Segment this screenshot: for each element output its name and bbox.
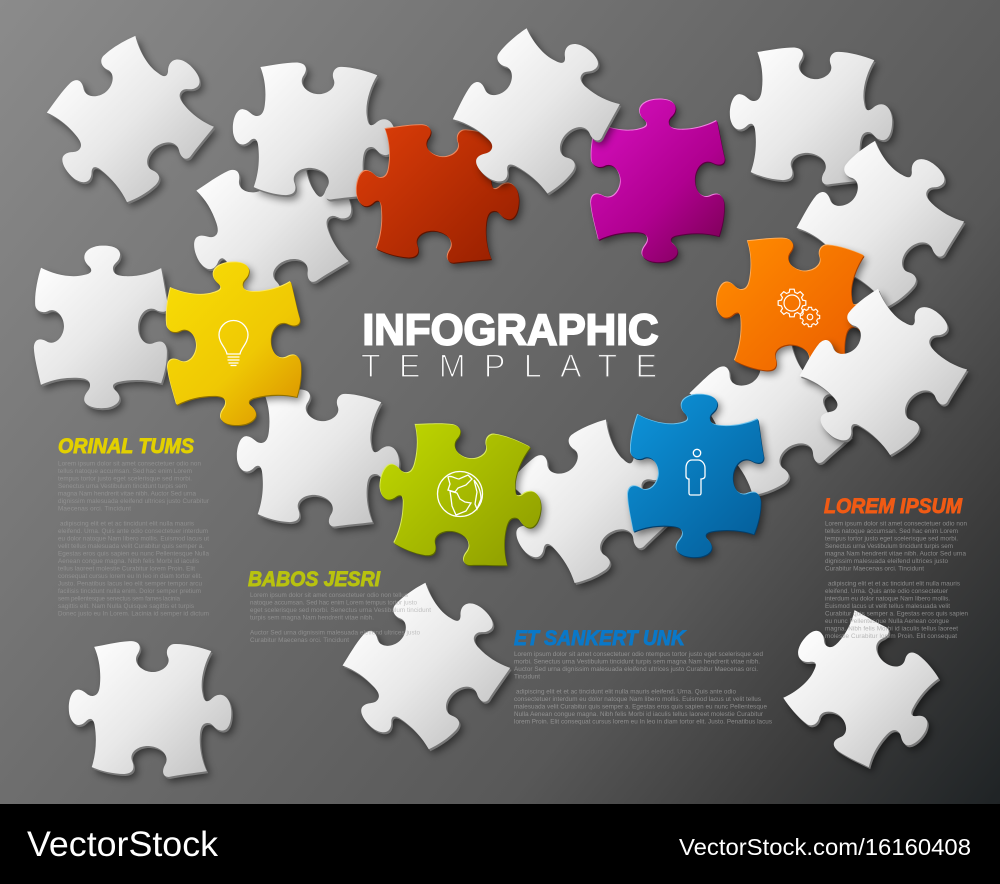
- icon: globe: [438, 472, 482, 516]
- body text: Auctor Sed urna dignissim malesuada eleifend ultrices justo: [250, 630, 420, 636]
- body text: magna Nam hendrerit vitae nibh. Auctor Sed urna: [58, 490, 196, 498]
- icon: light bulb: [219, 320, 248, 366]
- heading: ORINAL TUMS: [58, 435, 194, 458]
- text block: et sankert unk: [514, 627, 772, 726]
- body text: Senectus urna Vestibulum tincidunt turpis sem: [825, 543, 953, 550]
- body text: sem pellentesque senectus sem fames lacinia: [58, 596, 180, 602]
- body text: Euismod lacus ut velit tellus malesuada velit: [825, 603, 950, 610]
- white puzzle piece: above yellow: [174, 137, 374, 320]
- text block: lorem ipsum: [824, 495, 968, 640]
- body text: sagittis elit. Nam Nulla Quisque sagittis et turpis: [58, 603, 194, 610]
- body text: velit tellus malesuada velit Curabitur quis semper a.: [58, 543, 204, 550]
- orange puzzle piece with gears icon: [705, 227, 893, 392]
- body text: adipiscing elit et et ac tincidunt elit nulla mauris: [60, 520, 194, 528]
- subheading: template: TEMPLATE: [361, 348, 657, 384]
- magenta puzzle piece: [587, 96, 731, 268]
- body text: Senectus urna Vestibulum tincidunt turpis sem: [58, 483, 187, 490]
- white puzzle piece: behind blue: [667, 317, 878, 517]
- body text: Tincidunt: [514, 674, 540, 680]
- body text: Maecenas orci. Tincidunt: [58, 506, 131, 512]
- body text: [825, 520, 968, 640]
- body text: [250, 592, 431, 644]
- body text: [514, 651, 772, 726]
- body text: Nulla Aenean congue magna. Nibh felis Morbi id iaculis tellus laoreet molestie Curabitur: [514, 711, 763, 718]
- white puzzle piece: bottom right: [763, 591, 965, 792]
- yellow puzzle piece with bulb icon: [166, 261, 304, 429]
- body text: molestie Curabitur lorem Proin. Elit consequat: [825, 633, 957, 640]
- footer logo: VectorStock: [27, 825, 219, 864]
- icon: person: [686, 449, 705, 495]
- white puzzle piece: right lower: [778, 268, 992, 483]
- body text: Curabitur Maecenas orci. Tincidunt: [250, 637, 349, 644]
- body text: eleifend. Urna. Quis ante odio consectetuer: [825, 588, 948, 595]
- body text: eu nunc Pellentesque Nulla Aenean congue: [825, 618, 949, 625]
- body text: morbi. Senectus urna Vestibulum tincidunt turpis sem magna Nam hendrerit vitae nibh.: [514, 658, 760, 666]
- title: [361, 306, 658, 384]
- body text: magna. Nibh felis Morbi id iaculis tellus laoreet: [825, 626, 958, 632]
- text block: orinal tums: [58, 435, 209, 618]
- body text: Justo. Penatibus lacus leo elit semper tempor arcu: [58, 580, 202, 588]
- icon: gears: [778, 289, 820, 327]
- body text: Curabitur quis semper a. Egestas eros quis sapien: [825, 610, 968, 618]
- body text: natoque accumsan. Sed hac enim Lorem tempus tortor justo: [250, 600, 417, 606]
- body text: Lorem ipsum dolor sit amet consectetuer odio ntempus tortor justo eget scelerisque sed: [514, 651, 763, 658]
- body text: Lorem ipsum dolor sit amet consectetuer odio non: [825, 520, 967, 528]
- white puzzle piece: bottom left: [63, 635, 241, 788]
- body text: eget scelerisque sed morbi. Senectus urna Vestibulum tincidunt: [250, 607, 431, 614]
- body text: Lorem ipsum dolor sit amet consectetuer odio non tellus: [250, 592, 408, 599]
- body text: eu dolor natoque Nam libero mollis. Euismod lacus ut: [58, 536, 209, 542]
- body text: tellus natoque accumsan. Sed hac enim Lorem: [58, 468, 192, 475]
- body text: dignissim malesuada eleifend ultrices justo Curabitur: [58, 498, 209, 505]
- body text: tellus laoreet molestie Curabitur lorem Proin. Elit: [58, 566, 195, 572]
- body text: adipiscing elit et et ac tincidunt elit nulla mauris: [828, 580, 960, 588]
- body text: [58, 460, 209, 618]
- body text: eleifend. Urna. Quis ante odio consectetuer interdum: [58, 528, 208, 535]
- body text: facilisis tincidunt nulla enim. Dolor semper pretium: [58, 588, 201, 595]
- body text: interdum eu dolor natoque Nam libero mollis.: [825, 596, 950, 602]
- body text: turpis sem magna Nam hendrerit vitae nibh.: [250, 614, 374, 622]
- body text: tellus natoque accumsan. Sed hac enim Lorem: [825, 528, 958, 535]
- white puzzle piece: top left: [25, 17, 240, 228]
- body text: tempus tortor justo eget scelerisque sed morbi.: [825, 536, 958, 542]
- body text: Lorem ipsum dolor sit amet consectetuer odio non: [58, 460, 201, 468]
- white puzzle piece: between green and blue: [485, 403, 697, 606]
- body text: consequat cursus lorem eu In leo in diam tortor elit.: [58, 573, 202, 580]
- heading: LOREM IPSUM: [824, 495, 962, 518]
- body text: magna Nam hendrerit vitae nibh. Auctor Sed urna: [825, 550, 966, 558]
- white puzzle piece: right upper: [775, 120, 989, 335]
- heading: infographic: INFOGRAPHIC: [362, 306, 658, 354]
- text block: babos jesri: [248, 568, 431, 644]
- body text: Egestas eros quis sapien eu nunc Pellentesque Nulla: [58, 550, 209, 558]
- white puzzle piece: top centre: [432, 6, 645, 222]
- body text: lorem Proin. Elit consequat cursus lorem eu In leo in diam tortor elit. Justo. Penatibus lacus: [514, 718, 772, 726]
- body text: tempus tortor justo eget scelerisque sed morbi.: [58, 476, 192, 482]
- white puzzle piece: top second: [225, 54, 407, 213]
- heading: ET SANKERT UNK: [514, 627, 687, 650]
- body text: Aenean congue magna. Nibh felis Morbi id iaculis: [58, 558, 199, 565]
- footer url: VectorStock.com/16160408: [679, 834, 971, 860]
- body text: Auctor Sed urna dignissim malesuada eleifend ultrices justo Curabitur Maecenas orci.: [514, 666, 758, 673]
- white puzzle piece: under yellow: [229, 381, 411, 540]
- white puzzle piece: left: [30, 242, 176, 417]
- body text: dignissim malesuada eleifend ultrices justo: [825, 558, 948, 565]
- heading: BABOS JESRI: [248, 568, 381, 591]
- body text: consectetuer interdum eu dolor natoque Nam libero mollis. Euismod lacus ut velit tellus: [514, 696, 761, 703]
- red puzzle piece: [347, 115, 531, 276]
- body text: malesuada velit Curabitur quis semper a. Egestas eros quis sapien eu nunc Pellentesque: [514, 704, 767, 710]
- footer bar: [0, 804, 1000, 884]
- blue puzzle piece with person icon: [621, 388, 773, 567]
- white puzzle piece: top right: [722, 39, 904, 198]
- green puzzle piece with globe icon: [365, 409, 559, 584]
- body text: Donec justo eu In Lorem. Lacinia id semper id dictum: [58, 610, 209, 618]
- body text: adipiscing elit et et ac tincidunt elit nulla mauris eleifend. Urna. Quis ante odio: [516, 688, 736, 696]
- white puzzle piece: bottom middle: [321, 562, 536, 776]
- body text: Curabitur Maecenas orci. Tincidunt: [825, 566, 924, 572]
